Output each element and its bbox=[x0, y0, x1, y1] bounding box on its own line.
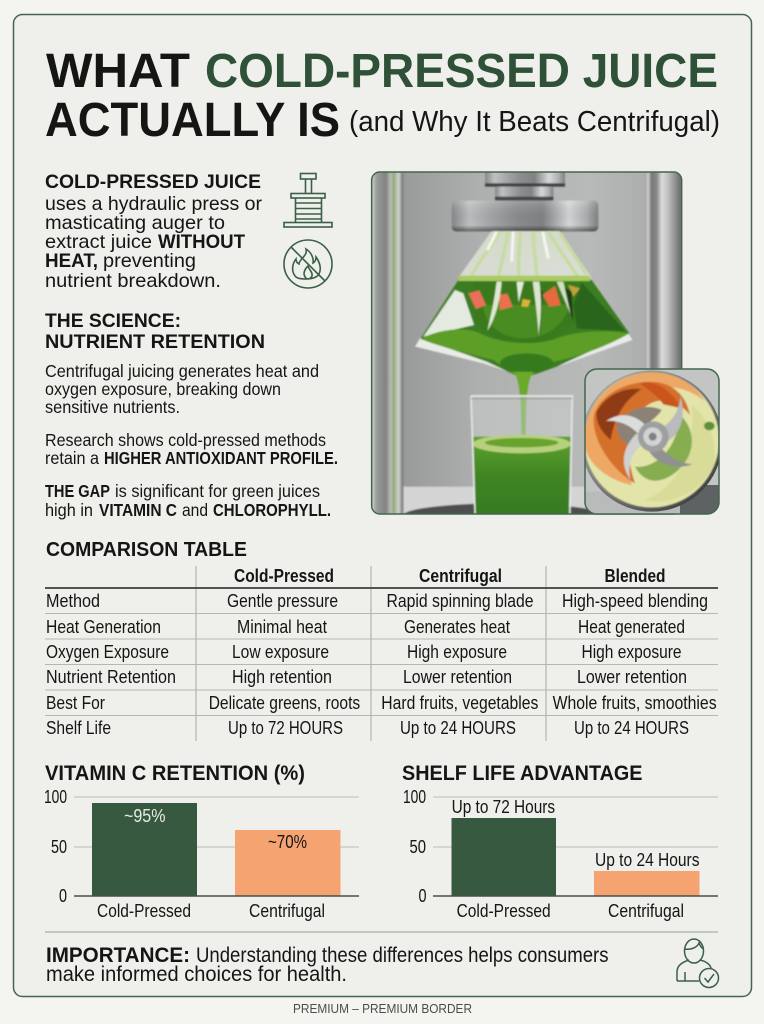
text block: centrifugal explanation bbox=[45, 361, 319, 417]
value label: ~95% bbox=[124, 806, 166, 826]
table row: method: High-speed blending bbox=[562, 591, 708, 611]
table row: method: Gentle pressure bbox=[227, 591, 338, 611]
title: WHAT bbox=[46, 45, 190, 98]
table row: method bbox=[46, 591, 708, 611]
text block: the gap: CHLOROPHYLL. bbox=[213, 500, 331, 520]
table row: shelf life bbox=[46, 718, 689, 738]
callout: importance: IMPORTANCE: bbox=[46, 943, 190, 967]
table row: shelf life: Up to 24 HOURS bbox=[574, 718, 689, 738]
table row: oxygen exposure: Low exposure bbox=[232, 642, 329, 662]
table header row: Cold-Pressed bbox=[234, 566, 334, 586]
heading: shelf life advantage: SHELF LIFE ADVANTAGE bbox=[402, 761, 642, 785]
text block: cold-pressed juice definition: HEAT, bbox=[45, 250, 98, 272]
bar: cold-pressed 72 hours bbox=[452, 818, 556, 896]
text block: research finding: Research shows cold-pressed methods bbox=[45, 430, 326, 450]
text block: cold-pressed juice definition: nutrient breakdown. bbox=[45, 270, 221, 292]
text block: centrifugal explanation: oxygen exposure, breaking down bbox=[45, 379, 281, 399]
bag, coordinates of reference bag crop bbox=[415, 231, 632, 375]
photo: hydraulic press with juice bag and glass bbox=[372, 170, 722, 527]
comparison table bbox=[45, 566, 718, 741]
category labels: Centrifugal bbox=[249, 901, 325, 921]
table row: nutrient retention: Lower retention bbox=[403, 667, 512, 687]
text block: research finding bbox=[45, 430, 338, 468]
table row: best for bbox=[46, 693, 717, 713]
y axis labels: 0 bbox=[59, 886, 67, 906]
title: (and Why It Beats Centrifugal) bbox=[349, 106, 720, 138]
table row: best for: Delicate greens, roots bbox=[209, 693, 360, 713]
callout: importance bbox=[46, 943, 608, 986]
title: COLD-PRESSED JUICE bbox=[205, 45, 718, 98]
text block: cold-pressed juice definition bbox=[45, 171, 262, 292]
bar chart: vitamin c retention bbox=[44, 787, 359, 921]
table row: best for: Hard fruits, vegetables bbox=[381, 693, 538, 713]
heading: vitamin c retention: VITAMIN C RETENTION (%) bbox=[45, 761, 305, 785]
bar: centrifugal 24 hours bbox=[594, 871, 700, 896]
bar: centrifugal 70 percent bbox=[235, 830, 340, 896]
text block: centrifugal explanation: Centrifugal juicing generates heat and bbox=[45, 361, 319, 381]
text block: the gap: and bbox=[182, 500, 208, 520]
category labels bbox=[457, 901, 684, 921]
y axis labels: 0 bbox=[418, 886, 426, 906]
text block: research finding: retain a bbox=[45, 448, 99, 468]
text block: the gap: is significant for green juices bbox=[115, 481, 320, 501]
heading: comparison table: COMPARISON TABLE bbox=[46, 538, 247, 561]
stream bbox=[514, 371, 534, 436]
y axis labels: 50 bbox=[410, 837, 426, 857]
table row: oxygen exposure: Oxygen Exposure bbox=[46, 642, 169, 662]
category labels: Cold-Pressed bbox=[97, 901, 191, 921]
text block: cold-pressed juice definition: masticating auger to bbox=[45, 212, 225, 234]
table row: nutrient retention bbox=[46, 667, 687, 687]
text block: cold-pressed juice definition: extract juice bbox=[45, 231, 152, 253]
category labels bbox=[97, 901, 325, 921]
y axis labels: 50 bbox=[51, 837, 67, 857]
table row: method: Rapid spinning blade bbox=[386, 591, 534, 611]
heading: the science: NUTRIENT RETENTION bbox=[45, 331, 265, 353]
callout: importance: Understanding these differences helps consumers bbox=[196, 943, 608, 967]
table header row bbox=[234, 566, 666, 586]
heading: the science: THE SCIENCE: bbox=[45, 310, 181, 332]
table row: shelf life: Up to 24 HOURS bbox=[400, 718, 516, 738]
table header row: Blended bbox=[604, 566, 666, 586]
table row: shelf life: Up to 72 HOURS bbox=[228, 718, 343, 738]
y axis labels bbox=[44, 787, 67, 906]
icon: no heat flame bbox=[284, 240, 332, 288]
table row: nutrient retention: Nutrient Retention bbox=[46, 667, 176, 687]
y axis labels bbox=[403, 787, 426, 906]
table row: heat generation: Heat generated bbox=[578, 617, 685, 637]
table row: heat generation: Minimal heat bbox=[237, 617, 327, 637]
title: ACTUALLY IS bbox=[45, 94, 340, 147]
glass bbox=[471, 396, 572, 515]
table row: oxygen exposure: High exposure bbox=[407, 642, 507, 662]
table row: oxygen exposure bbox=[46, 642, 682, 662]
value label: Up to 24 Hours bbox=[595, 850, 700, 870]
category labels: Cold-Pressed bbox=[457, 901, 551, 921]
icon: person with check bbox=[677, 939, 718, 988]
table row: best for: Whole fruits, smoothies bbox=[553, 693, 717, 713]
table row: shelf life: Shelf Life bbox=[46, 718, 111, 738]
text block: cold-pressed juice definition: uses a hydraulic press or bbox=[45, 193, 262, 215]
bar: cold-pressed 95 percent bbox=[92, 803, 197, 896]
inset photo: centrifugal blade bbox=[581, 369, 722, 515]
value label: Up to 72 Hours bbox=[452, 797, 555, 817]
y axis labels: 100 bbox=[403, 787, 426, 807]
value label: ~70% bbox=[268, 832, 307, 852]
table header row: Centrifugal bbox=[419, 566, 502, 586]
callout: importance: make informed choices for health. bbox=[46, 962, 347, 986]
text block: cold-pressed juice definition: preventing bbox=[103, 250, 196, 272]
table row: nutrient retention: Lower retention bbox=[577, 667, 687, 687]
text block: cold-pressed juice definition: WITHOUT bbox=[158, 231, 245, 253]
table row: nutrient retention: High retention bbox=[232, 667, 332, 687]
text block: the gap: VITAMIN C bbox=[99, 500, 177, 520]
table row: heat generation bbox=[46, 617, 685, 637]
table row: oxygen exposure: High exposure bbox=[582, 642, 682, 662]
text block: research finding: HIGHER ANTIOXIDANT PROFILE. bbox=[104, 448, 338, 468]
text block: centrifugal explanation: sensitive nutrients. bbox=[45, 397, 180, 417]
bar chart: shelf life advantage bbox=[403, 787, 718, 921]
footer text: PREMIUM – PREMIUM BORDER bbox=[293, 1002, 472, 1016]
text block: the gap: THE GAP bbox=[45, 481, 110, 501]
table row: best for: Best For bbox=[46, 693, 105, 713]
table row: heat generation: Generates heat bbox=[404, 617, 510, 637]
category labels: Centrifugal bbox=[608, 901, 684, 921]
heading: the science bbox=[45, 310, 265, 353]
icon: hydraulic press bbox=[284, 174, 332, 227]
text block: cold-pressed juice definition: COLD-PRESSED JUICE bbox=[45, 171, 261, 193]
table row: method: Method bbox=[46, 591, 100, 611]
title bbox=[45, 45, 720, 147]
y axis labels: 100 bbox=[44, 787, 67, 807]
text block: the gap: high in bbox=[45, 500, 93, 520]
table row: heat generation: Heat Generation bbox=[46, 617, 161, 637]
text block: the gap bbox=[45, 481, 331, 520]
